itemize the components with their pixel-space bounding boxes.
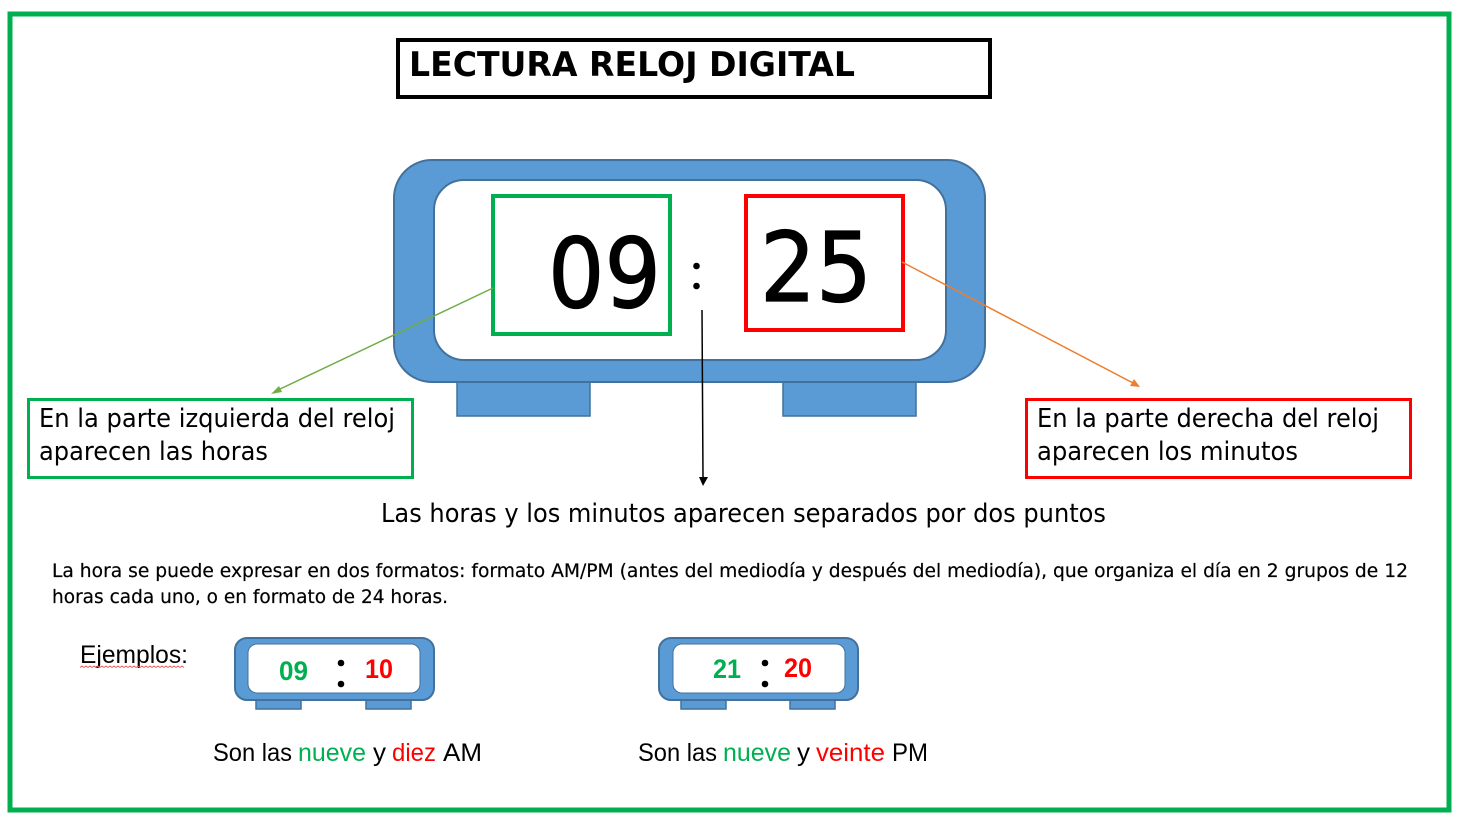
minutes box (746, 196, 903, 330)
example clock 09:10: 10 (365, 654, 393, 684)
example clock 21:20 (659, 638, 858, 709)
example sentence PM: veinte (816, 739, 885, 767)
example sentence PM: nueve (723, 739, 791, 767)
examples label: Ejemplos: (80, 641, 188, 669)
example sentence PM: y (797, 739, 811, 767)
caption: separator: Las horas y los minutos aparecen separados por dos puntos (381, 499, 1106, 529)
arrow: hours to left label (271, 288, 493, 394)
callout: hours: aparecen las horas (39, 437, 268, 467)
example sentence AM (213, 739, 482, 767)
example sentence PM: Son las (638, 739, 717, 767)
example clock 09:10 (235, 638, 434, 709)
clock body (394, 160, 985, 382)
title box (398, 40, 990, 97)
callout: minutes (1026, 400, 1410, 478)
example clock 21:20: 21 (713, 654, 741, 684)
arrow: minutes to right label (902, 262, 1140, 387)
example sentence PM (638, 739, 928, 767)
example clock 21:20: 20 (784, 653, 812, 683)
example sentence AM: diez (392, 739, 436, 767)
example sentence AM: Son las (213, 739, 292, 767)
example sentence AM: AM (443, 739, 482, 767)
callout: hours: En la parte izquierda del reloj (39, 404, 395, 434)
arrow: colon to caption (699, 310, 708, 486)
title box: LECTURA RELOJ DIGITAL (409, 45, 855, 85)
example clock 09:10: 09 (279, 656, 308, 686)
callout: minutes: En la parte derecha del reloj (1037, 404, 1379, 434)
clock feet (457, 381, 916, 416)
explanation text: horas cada uno, o en formato de 24 horas. (52, 586, 448, 608)
colon (693, 263, 700, 289)
explanation text (52, 560, 1408, 608)
callout: minutes: aparecen los minutos (1037, 437, 1298, 467)
hours box: 09 (548, 218, 661, 330)
hours box (493, 196, 670, 334)
explanation text: La hora se puede expresar en dos formatos: formato AM/PM (antes del mediodía y después del mediodía), que organiza el día en 2 grupos de 12 (52, 560, 1408, 582)
clock screen (434, 180, 946, 360)
minutes box: 25 (760, 212, 872, 324)
example sentence AM: y (373, 739, 387, 767)
main clock (394, 160, 985, 416)
example sentence PM: PM (892, 739, 928, 767)
callout: hours (28, 400, 412, 478)
example sentence AM: nueve (298, 739, 366, 767)
